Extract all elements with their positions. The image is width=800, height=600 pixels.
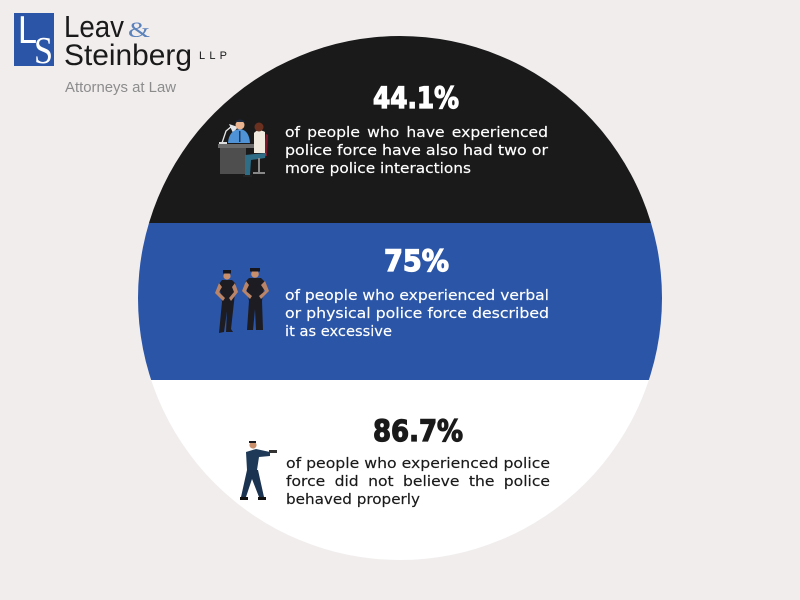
logo tagline: Attorneys at Law [65, 79, 176, 96]
logo mark: S [34, 30, 53, 72]
text: interactions: of people who have experienced [285, 125, 548, 141]
heading: 75%: 75% [384, 244, 449, 278]
logo wordmark: LLP [199, 50, 227, 62]
logo wordmark [64, 9, 227, 72]
logo [14, 9, 227, 96]
text: behaved properly [286, 456, 550, 508]
logo mark: L [18, 9, 37, 52]
logo mark [14, 9, 54, 72]
panel: black segment [138, 36, 662, 223]
text: interactions: more police interactions [285, 161, 471, 177]
text: behaved properly: force did not believe the police [286, 474, 550, 490]
icon: two police officers [215, 268, 269, 333]
logo wordmark: & [128, 17, 150, 42]
text: excessive [285, 288, 549, 340]
logo wordmark: Leav [64, 9, 124, 44]
infographic [14, 13, 662, 560]
text: behaved properly: of people who experienced police [286, 456, 550, 472]
text: excessive: or physical police force described [285, 306, 549, 322]
text: interactions [285, 125, 548, 177]
icon: officer at desk with civilian [218, 120, 268, 177]
text: excessive: it as excessive [285, 324, 392, 340]
text: behaved properly: behaved properly [286, 492, 420, 508]
heading: 86.7%: 86.7% [373, 414, 463, 448]
panel: white segment [138, 380, 662, 560]
panel: blue segment [138, 223, 662, 380]
icon: officer aiming gun [240, 441, 277, 500]
text: interactions: police force have also had two or [285, 143, 548, 159]
logo wordmark: Steinberg [64, 39, 192, 72]
text: excessive: of people who experienced verbal [285, 288, 549, 304]
heading: 44.1%: 44.1% [373, 81, 459, 115]
